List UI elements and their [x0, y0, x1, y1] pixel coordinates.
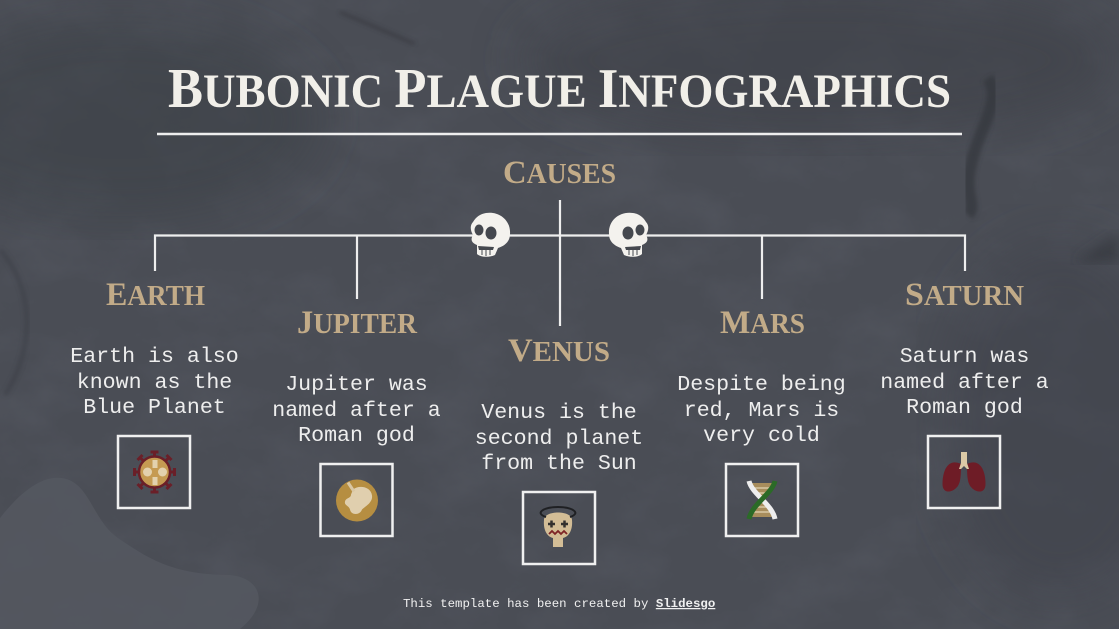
title underline	[157, 133, 962, 135]
text: Venus description: Venus is the	[481, 401, 637, 425]
icon: bacterium	[336, 480, 378, 522]
icon frame: Mars	[726, 464, 798, 536]
icon frame: Earth	[118, 436, 190, 508]
tree connector lines	[155, 200, 965, 326]
heading: Earth: EARTH	[106, 277, 205, 313]
text: Earth description: known as the	[77, 371, 232, 395]
column: Mars	[677, 305, 846, 536]
text: Jupiter description: named after a	[272, 399, 441, 423]
text: Venus description: second planet	[475, 427, 643, 451]
text: Jupiter description: Jupiter was	[285, 373, 428, 397]
text: Jupiter description: Roman god	[298, 424, 415, 448]
column: Jupiter	[272, 305, 441, 536]
icon: DNA helix	[749, 481, 775, 519]
icon: lungs	[942, 452, 986, 492]
icon: right skull	[609, 213, 648, 257]
icon frame: Jupiter	[320, 464, 392, 536]
decorative blob bottom left	[0, 478, 259, 629]
title: BUBONIC PLAGUE INFOGRAPHICS	[168, 58, 951, 120]
text: Saturn description: named after a	[880, 371, 1049, 395]
icon frame: Venus	[523, 492, 595, 564]
heading: Venus: VENUS	[508, 333, 610, 369]
heading: Jupiter: JUPITER	[297, 305, 418, 341]
heading: causes: CAUSES	[503, 155, 616, 191]
text: Saturn description: Roman god	[906, 396, 1023, 420]
text: Mars description: very cold	[703, 424, 820, 448]
icon: virus	[134, 451, 176, 493]
icon frame: Saturn	[928, 436, 1000, 508]
heading: Saturn: SATURN	[905, 277, 1024, 313]
footer credit: This template has been created by Slidesgo	[403, 597, 715, 611]
text: Earth description: Earth is also	[70, 345, 239, 369]
icon: left skull	[471, 213, 510, 257]
text: Venus description: from the Sun	[481, 452, 637, 476]
text: Mars description: Despite being	[677, 373, 846, 397]
heading: Mars: MARS	[720, 305, 805, 341]
text: Saturn description: Saturn was	[900, 345, 1029, 369]
column: Earth	[70, 277, 239, 508]
text: Earth description: Blue Planet	[83, 396, 226, 420]
text: Mars description: red, Mars is	[684, 399, 839, 423]
column: Saturn	[880, 277, 1049, 508]
column: Venus	[475, 333, 643, 564]
icon: dizzy head	[541, 507, 575, 547]
